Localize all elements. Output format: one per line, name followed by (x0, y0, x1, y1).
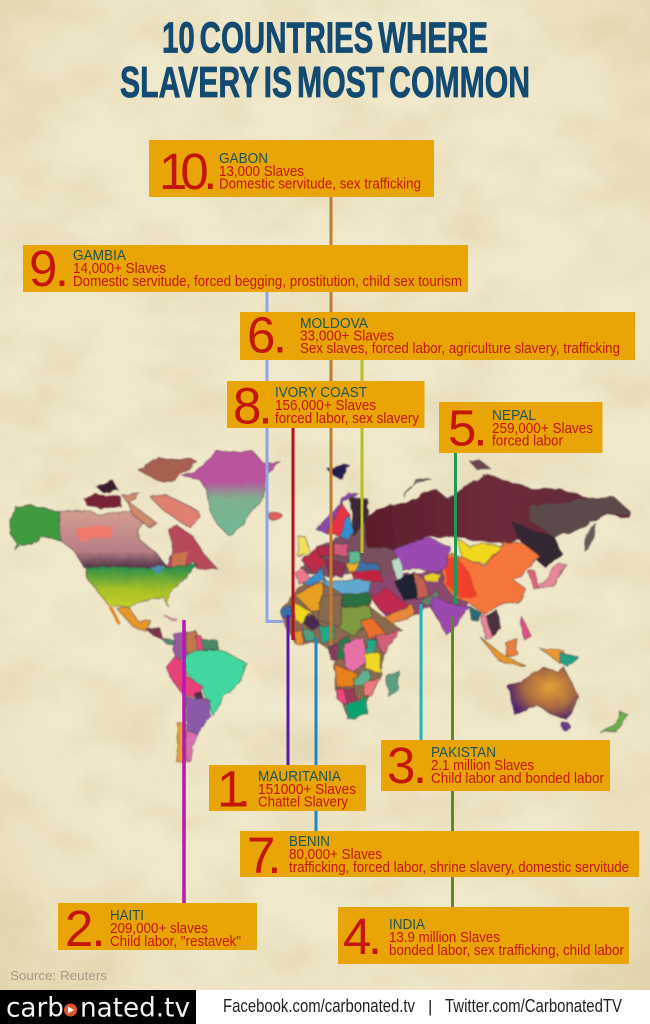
logo: carbonated.tv (6, 992, 190, 1024)
panel: 7 Benin: trafficking, forced labor, shrine slavery, domestic servitude (289, 860, 629, 876)
panel: 3 Pakistan: 3. (387, 737, 427, 794)
panel: 3 Pakistan: PAKISTAN (431, 745, 496, 761)
panel: 10 Gabon: 10. (159, 143, 217, 200)
panel: 1 Mauritania: 1. (217, 760, 251, 818)
line: Gambia (267, 292, 284, 622)
panel: 6 Moldova: 6. (247, 306, 287, 364)
panel: 6 Moldova (240, 306, 635, 364)
panel: 5 Nepal: 5. (448, 400, 488, 456)
panel: 9 Gambia: GAMBIA (73, 248, 126, 264)
panel: 10 Gabon: Domestic servitude, sex trafficking (219, 176, 421, 192)
line: Haiti (182, 620, 186, 903)
panel: 2 Haiti: 2. (65, 900, 106, 957)
panel: 5 Nepal: 259,000+ Slaves (492, 421, 593, 437)
panel: 10 Gabon: GABON (219, 151, 268, 167)
panel: 3 Pakistan: Child labor and bonded labor (431, 771, 604, 787)
line: Nepal (454, 453, 457, 604)
panel: 5 Nepal: forced labor (492, 434, 563, 450)
social links: Facebook.com/carbonated.tv (223, 996, 415, 1016)
panel: 7 Benin (240, 827, 639, 884)
panel: 8 Ivory Coast: 156,000+ Slaves (275, 398, 376, 414)
panel: 8 Ivory Coast (227, 378, 424, 434)
source note: Source: Reuters (10, 968, 108, 983)
map: Americas (10, 452, 282, 762)
line: Mauritania (286, 615, 290, 765)
panel: 3 Pakistan (381, 737, 610, 794)
panel: 2 Haiti (58, 900, 257, 957)
panel: 1 Mauritania: Chattel Slavery (258, 794, 349, 810)
panel: 9 Gambia (23, 240, 468, 297)
panel: 6 Moldova: Sex slaves, forced labor, agriculture slavery, trafficking (300, 341, 620, 357)
line: Moldova (360, 360, 364, 553)
title: 10 COUNTRIES WHERE (162, 14, 488, 62)
panel: 1 Mauritania: MAURITANIA (258, 769, 341, 785)
panel: 2 Haiti: Child labor, "restavek" (110, 934, 241, 950)
Africa (297, 583, 323, 610)
panel: 4 India: bonded labor, sex trafficking, child labor (389, 943, 624, 959)
panel: 6 Moldova: MOLDOVA (300, 316, 368, 332)
line: Benin (314, 637, 318, 831)
world map (10, 452, 632, 762)
panel: 10 Gabon: 13,000 Slaves (219, 164, 304, 180)
panel: 7 Benin: 80,000+ Slaves (289, 847, 382, 863)
panel: 10 Gabon (149, 140, 434, 200)
panel: 2 Haiti: HAITI (110, 908, 144, 924)
panel: 9 Gambia: 9. (29, 240, 69, 297)
panel: 6 Moldova: 33,000+ Slaves (300, 328, 394, 344)
panel: 9 Gambia: 14,000+ Slaves (73, 261, 166, 277)
panel: 1 Mauritania: 151000+ Slaves (258, 782, 356, 798)
panel: 9 Gambia: Domestic servitude, forced begging, prostitution, child sex tourism (73, 274, 462, 290)
Europe (317, 493, 358, 533)
line: Gabon (330, 197, 332, 645)
panel: 7 Benin: BENIN (289, 834, 330, 850)
panel: 8 Ivory Coast: IVORY COAST (275, 385, 367, 401)
panel: 4 India: INDIA (389, 917, 425, 933)
panel: 5 Nepal: NEPAL (492, 408, 536, 424)
line: Ivory Coast (292, 428, 294, 640)
connector lines (184, 197, 456, 907)
panel: 3 Pakistan: 2.1 million Slaves (431, 758, 534, 774)
footer bar: | (428, 997, 432, 1016)
panel: 8 Ivory Coast: forced labor, sex slavery (275, 411, 420, 427)
map: Eurasia, Africa and Oceania (280, 459, 632, 733)
line: India (451, 616, 454, 907)
panel: 2 Haiti: 209,000+ slaves (110, 921, 208, 937)
panel: 1 Mauritania (209, 760, 366, 818)
panel: 7 Benin: 7. (247, 827, 282, 884)
panel: 4 India (338, 907, 629, 965)
panel: 5 Nepal (439, 400, 602, 456)
panel: 4 India: 13.9 million Slaves (389, 930, 500, 946)
panel: 8 Ivory Coast: 8. (233, 378, 273, 434)
title (120, 14, 530, 107)
line: Pakistan (420, 604, 422, 740)
panel: 4 India: 4. (343, 908, 382, 965)
footer bar (0, 990, 650, 1024)
